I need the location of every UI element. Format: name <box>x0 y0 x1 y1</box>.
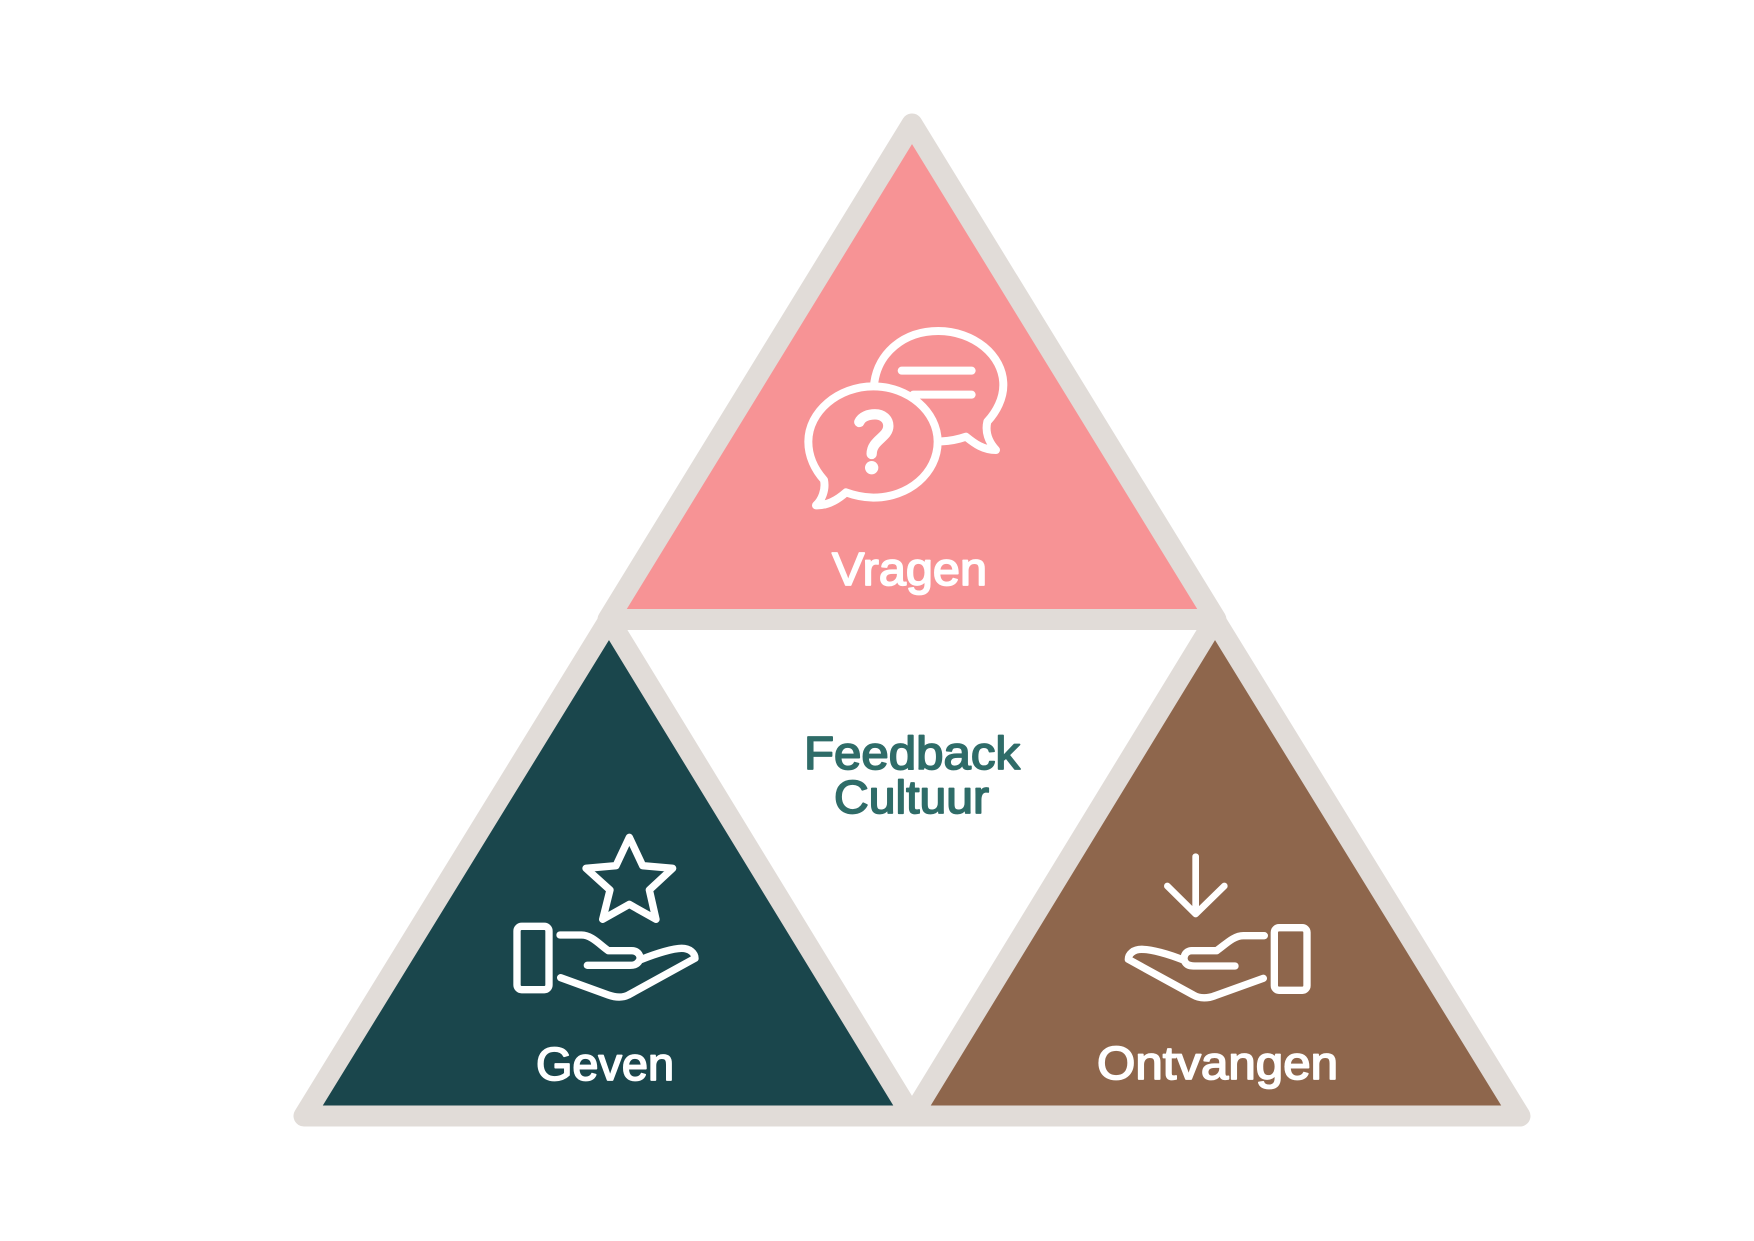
center title: Feedback Cultuur: Cultuur <box>834 771 989 823</box>
icon: hand receiving with down arrow <box>1128 857 1307 998</box>
panel: Geven triangle <box>304 620 912 1116</box>
label: Geven: Geven <box>536 1038 674 1090</box>
label: Ontvangen: Ontvangen <box>1097 1037 1338 1089</box>
icon: hand giving a star <box>517 837 695 997</box>
center title: Feedback Cultuur <box>804 727 1021 823</box>
panel: Vragen triangle <box>608 124 1216 620</box>
panel: Ontvangen triangle <box>912 620 1520 1116</box>
label: Vragen: Vragen <box>832 543 987 595</box>
icon: speech bubbles with question mark <box>808 331 1003 505</box>
center title: Feedback Cultuur: Feedback <box>804 727 1021 779</box>
